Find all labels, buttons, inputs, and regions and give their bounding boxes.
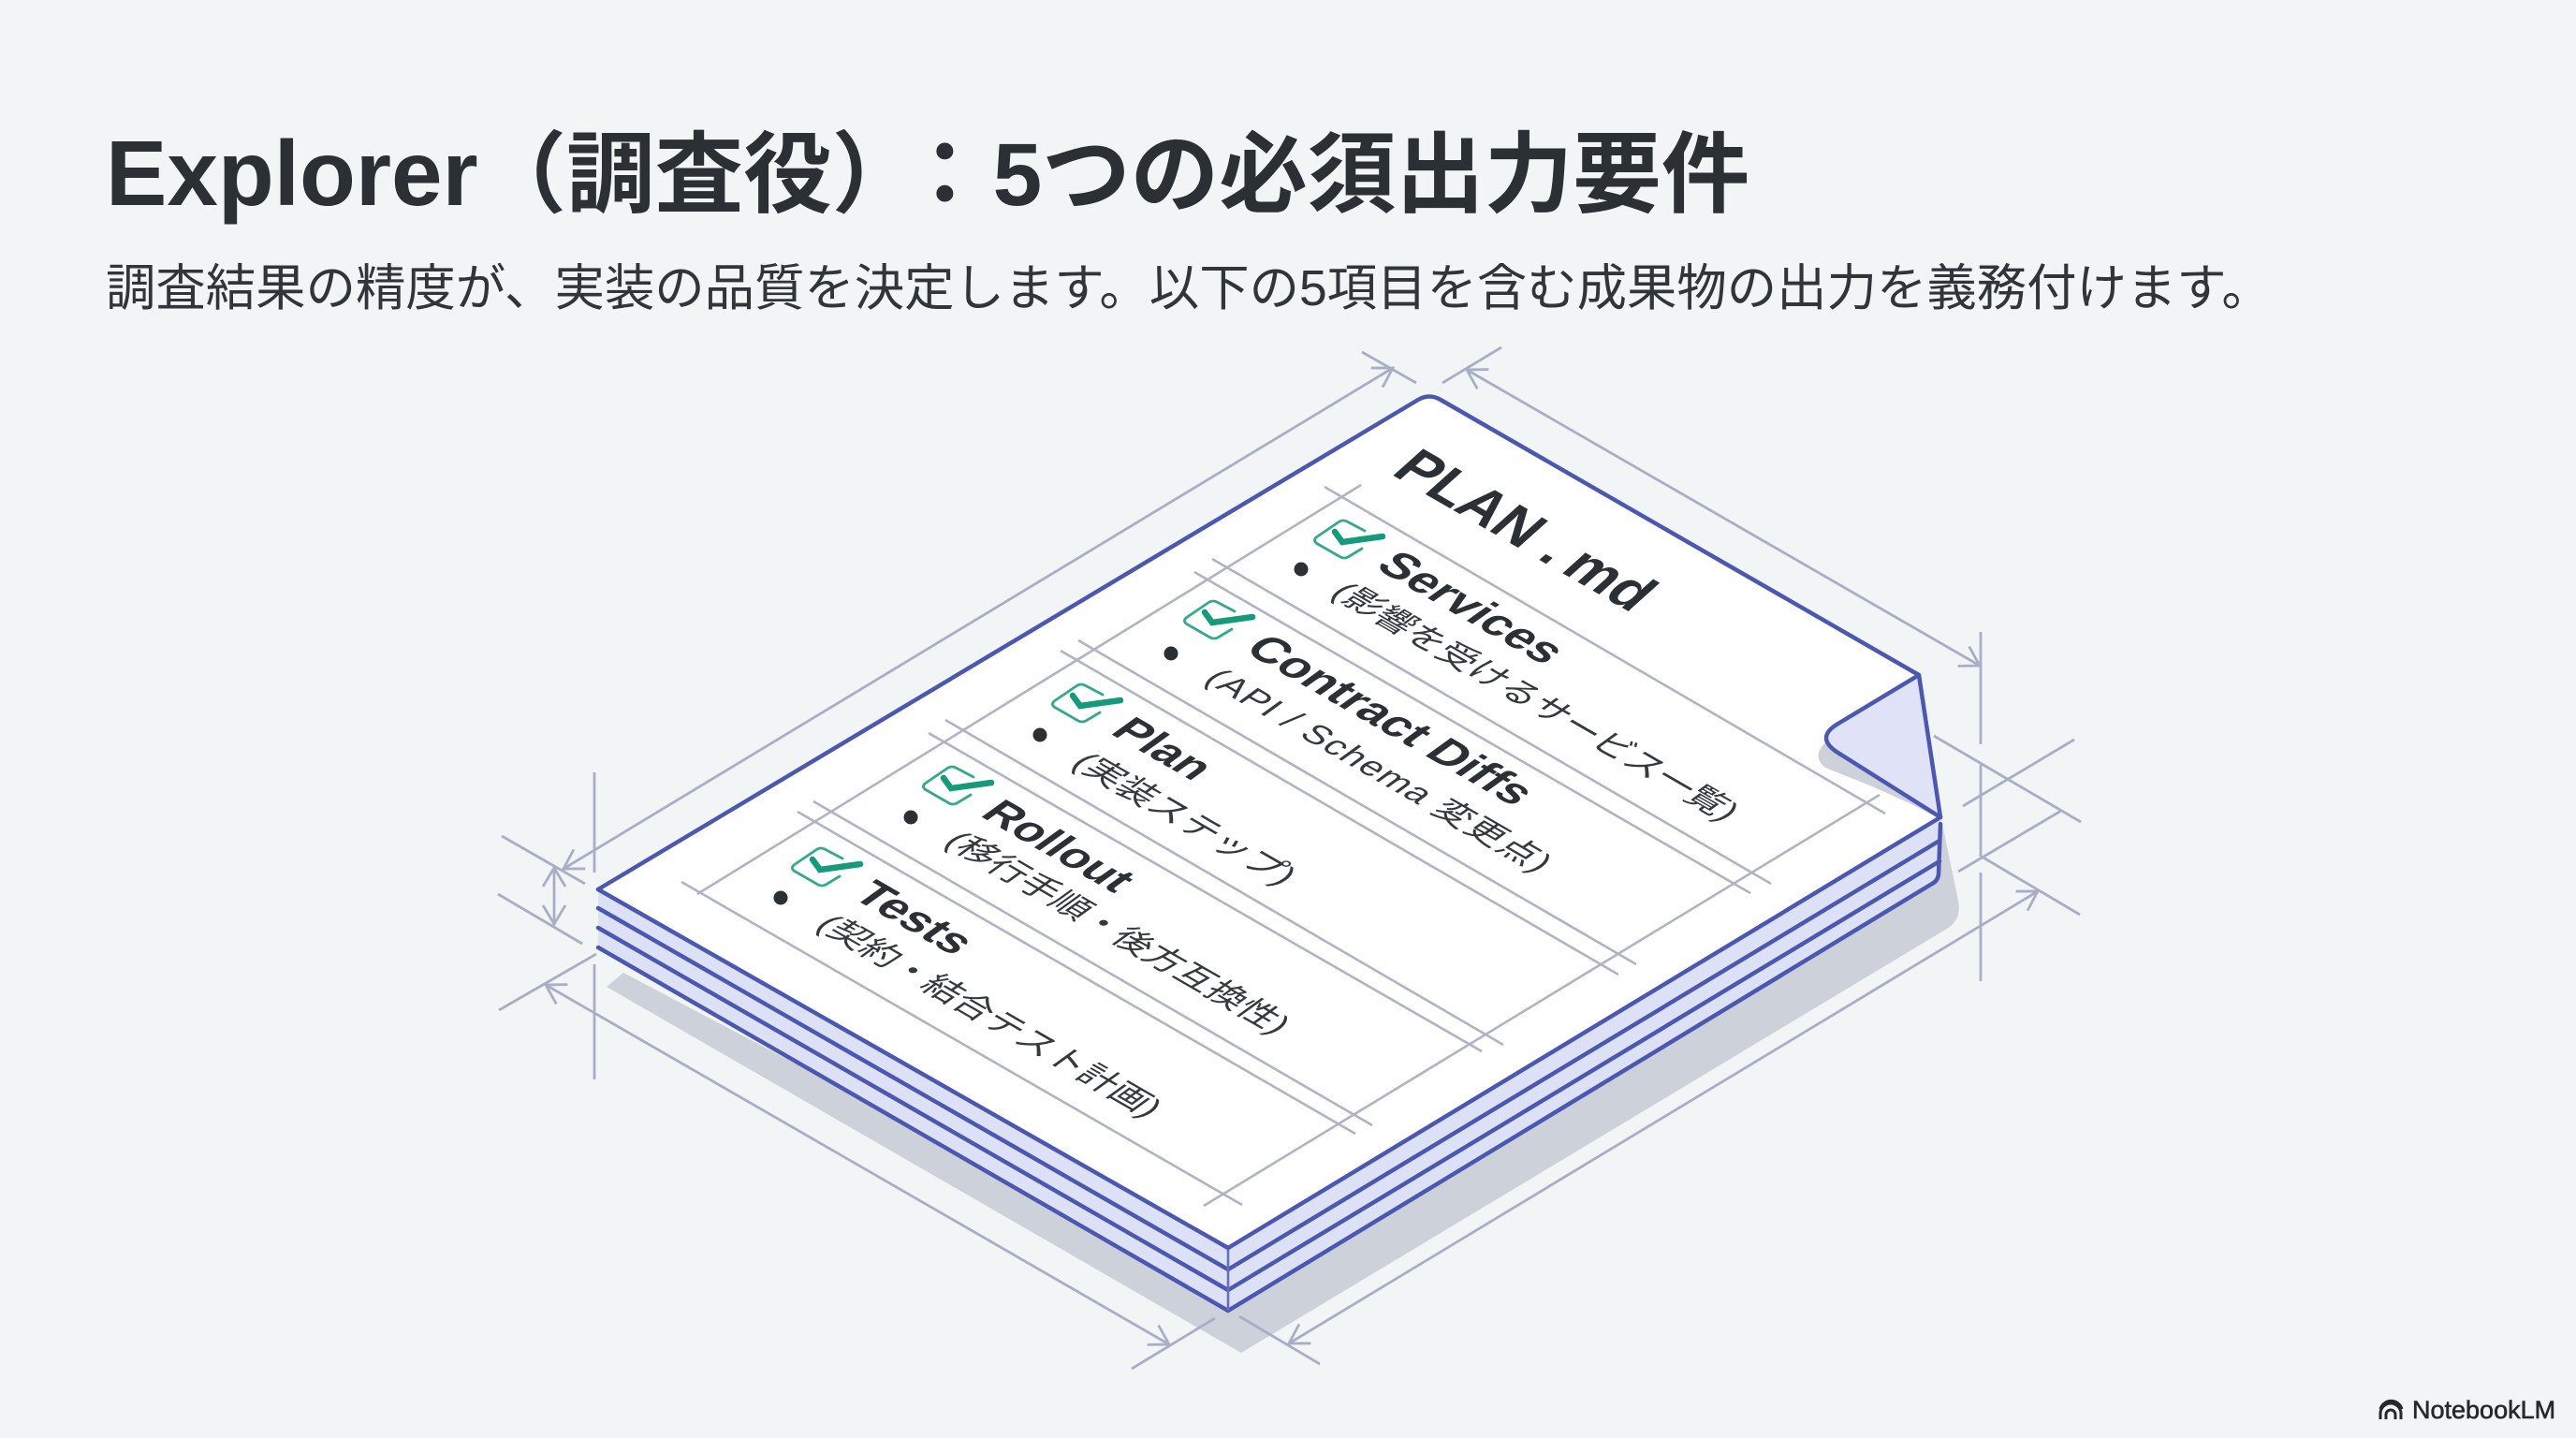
item: Services: (影響を受けるサービス一覧) — [1324, 577, 1749, 827]
subtitle: 調査結果の精度が、実装の品質を決定します。以下の5項目を含む成果物の出力を義務付けます。 — [106, 261, 2272, 316]
item: Plan: Plan — [1101, 711, 1224, 787]
fold shadow — [1818, 742, 1939, 818]
title: 5つの必須出力要件 — [993, 125, 1749, 225]
item: Contract Diffs: (API / Schema 変更点) — [1197, 663, 1563, 878]
dimension lines and arrows — [498, 347, 2081, 1369]
item: Tests: Tests — [842, 873, 986, 962]
item: Rollout: Rollout — [971, 793, 1146, 900]
item: Contract Diffs: Contract Diffs — [1235, 627, 1546, 813]
item: Services: Services — [1366, 543, 1578, 671]
item: Rollout: (移行手順・後方互換性) — [937, 826, 1300, 1039]
title: Explorer — [106, 122, 478, 225]
item: Tests: (契約・結合テスト計画) — [809, 909, 1172, 1123]
NotebookLM logo: NotebookLM — [2412, 1396, 2555, 1424]
title: ： — [900, 125, 989, 225]
ground shadow — [607, 824, 1959, 1353]
sheet stack sides — [598, 817, 1940, 1311]
item: Plan: (実装ステップ) — [1063, 747, 1305, 891]
folded corner — [1826, 675, 1940, 817]
title — [106, 122, 1749, 225]
title: （調査役） — [478, 125, 920, 225]
document title: PLAN.md — [1381, 438, 1671, 622]
page edges — [598, 397, 1919, 889]
item: Plan — [1033, 684, 1305, 891]
top sheet — [598, 397, 1940, 1248]
table rules — [681, 485, 1885, 1206]
